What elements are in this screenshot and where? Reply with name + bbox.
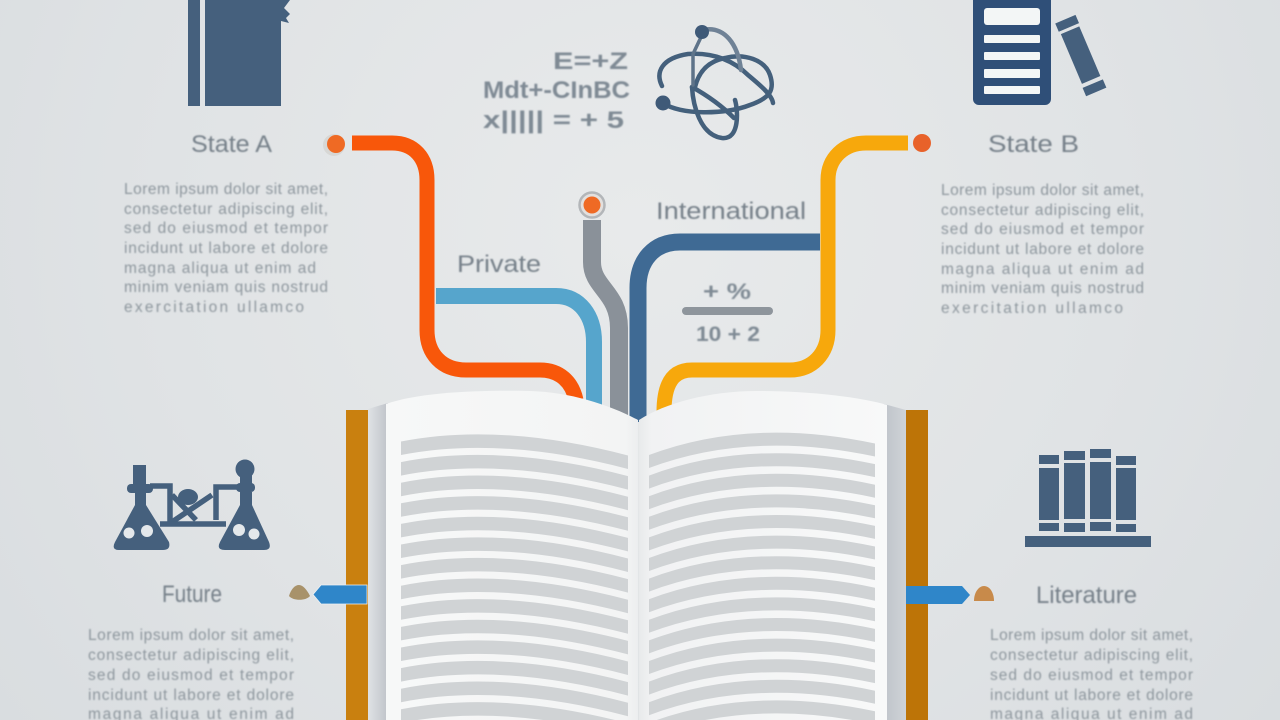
- connector: left blue tab: [313, 585, 367, 604]
- text block: State B body: [941, 182, 1144, 317]
- marker: left tan dot: [289, 585, 310, 600]
- right cover: [906, 410, 928, 720]
- equation fraction: [682, 279, 773, 346]
- connector: blue branch: [436, 296, 594, 410]
- heading: State A: State A: [191, 131, 272, 158]
- right page edge: [884, 404, 906, 720]
- label: Private: Private: [457, 251, 541, 278]
- text block: State B body: Lorem ipsum dolor sit amet,: [941, 182, 1144, 199]
- text block: Literature body: consectetur adipiscing elit,: [990, 647, 1193, 664]
- text block: Literature body: [990, 627, 1193, 720]
- heading: Future: Future: [162, 581, 222, 608]
- text block: State A body: minim veniam quis nostrud: [124, 279, 328, 296]
- text block: State B body: consectetur adipiscing elit,: [941, 202, 1144, 219]
- panel: Literature: [990, 582, 1193, 720]
- text block: Literature body: sed do eiusmod et tempor: [990, 667, 1193, 684]
- connector: yellow branch: [664, 143, 908, 412]
- left page: [386, 391, 638, 720]
- icon: atom: [656, 25, 773, 138]
- equation fraction: + %: [703, 279, 751, 304]
- connector: navy branch: [638, 242, 820, 422]
- right page text lines: [649, 433, 875, 720]
- text block: State A body: [124, 181, 328, 316]
- marker: orange left: [323, 134, 345, 156]
- text block: Future body: incidunt ut labore et dolore: [88, 687, 294, 704]
- text block: Future body: sed do eiusmod et tempor: [88, 667, 294, 684]
- icon: chemistry flasks: [114, 460, 270, 550]
- math formulas: Mdt+-CInBC: [483, 77, 630, 104]
- text block: Future body: [88, 627, 294, 720]
- text block: Future body: consectetur adipiscing elit,: [88, 647, 294, 664]
- marker: right tan dot: [974, 586, 994, 601]
- text block: State A body: consectetur adipiscing elit,: [124, 201, 328, 218]
- text block: State B body: minim veniam quis nostrud: [941, 280, 1144, 297]
- panel: State A: [124, 131, 328, 316]
- marker: orange right: [913, 134, 931, 152]
- heading: Literature: Literature: [1036, 582, 1137, 609]
- text block: Future body: Lorem ipsum dolor sit amet,: [88, 627, 294, 644]
- equation fraction: 10 + 2: [696, 323, 760, 346]
- marker: orange center: [580, 192, 604, 218]
- icon: books on shelf: [1025, 449, 1151, 547]
- left page text lines: [401, 434, 628, 720]
- connector: right blue tab: [906, 586, 970, 604]
- connector: grey branch: [592, 220, 619, 420]
- math formulas: E=+Z: [553, 48, 628, 75]
- text block: State A body: exercitation ullamco: [124, 299, 304, 316]
- left cover: [346, 410, 368, 720]
- icon: document and book: [973, 0, 1106, 105]
- label: International: International: [656, 198, 806, 225]
- text block: State A body: sed do eiusmod et tempor: [124, 220, 328, 237]
- open book: [346, 391, 928, 720]
- text block: State B body: incidunt ut labore et dolore: [941, 241, 1144, 258]
- text block: State B body: sed do eiusmod et tempor: [941, 221, 1144, 238]
- text block: State A body: Lorem ipsum dolor sit amet,: [124, 181, 328, 198]
- connector: orange branch: [352, 143, 576, 400]
- text block: State B body: exercitation ullamco: [941, 300, 1123, 317]
- icon: closed book: [188, 0, 290, 106]
- right page: [639, 391, 887, 720]
- text block: Literature body: Lorem ipsum dolor sit amet,: [990, 627, 1193, 644]
- math formulas: [483, 48, 630, 134]
- text block: State B body: magna aliqua ut enim ad: [941, 261, 1144, 278]
- heading: State B: State B: [988, 131, 1079, 158]
- panel: State B: [941, 131, 1144, 317]
- text block: State A body: incidunt ut labore et dolore: [124, 240, 328, 257]
- left page edge: [368, 403, 388, 720]
- math formulas: x||||| = + 5: [483, 107, 624, 134]
- text block: State A body: magna aliqua ut enim ad: [124, 260, 316, 277]
- text block: Literature body: incidunt ut labore et dolore: [990, 687, 1193, 704]
- panel: Future: [88, 581, 294, 720]
